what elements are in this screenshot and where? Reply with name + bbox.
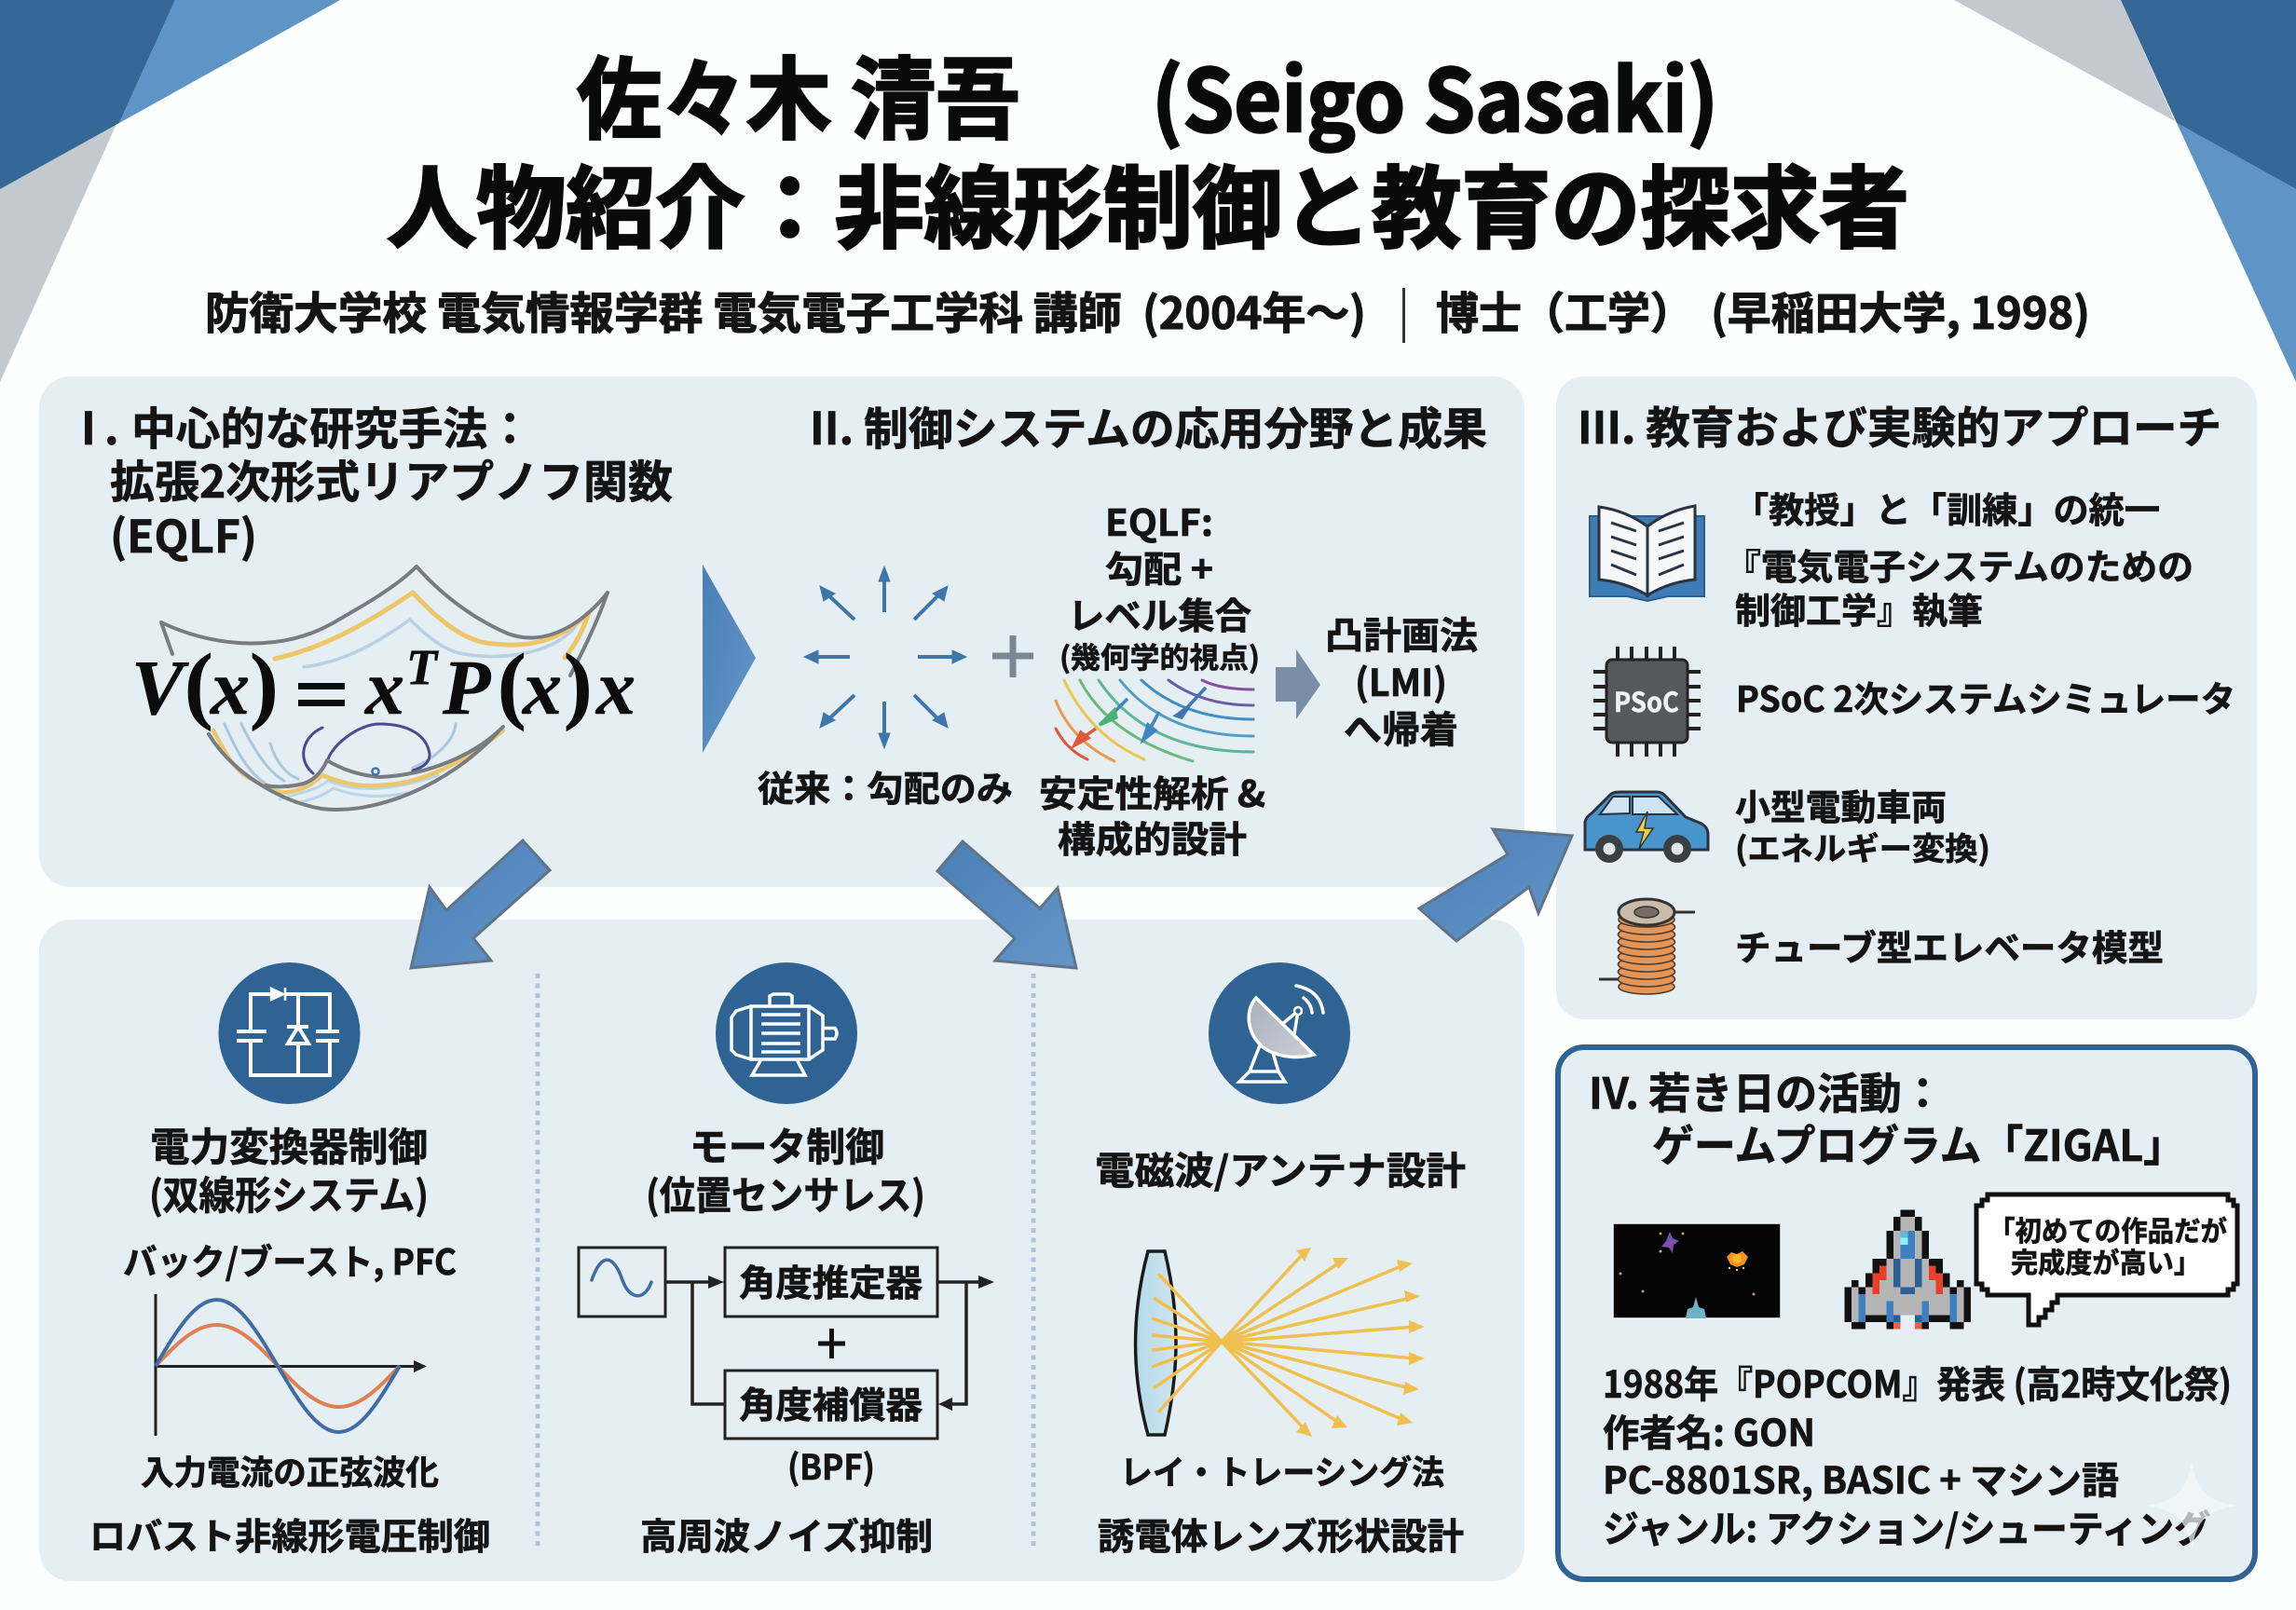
text: small electric vehicle [1735, 779, 1990, 869]
panel: III education and experimental approach [1556, 376, 2257, 1019]
label: EQLF gradient and level sets: レベル集合 [1068, 588, 1251, 640]
heading: section IV [1589, 1060, 2185, 1174]
chart: sensorless block diagram: 角度補償器 [739, 1377, 922, 1429]
subtitle: affiliation and degree: (2004年〜) [1142, 278, 1366, 342]
text: publication details [1603, 1355, 2232, 1553]
label: convex programming LMI: (LMI) [1355, 653, 1447, 707]
label: conventional gradient only: 従来：勾配のみ [758, 760, 1013, 812]
heading: section I: . [104, 392, 119, 457]
panel: IV early activity ZIGAL [1558, 1047, 2255, 1579]
icon: motor [716, 962, 857, 1104]
heading: section II: II. 制御システムの応用分野と成果 [810, 392, 1487, 457]
arrow: to education panel [1419, 829, 1572, 941]
icon: satellite dish [1209, 962, 1350, 1104]
subtitle: affiliation and degree: (早稲田大学, 1998) [1711, 278, 2090, 342]
label: stability analysis and constructive design [1039, 766, 1265, 864]
heading: power converter: 電力変換器制御 [150, 1116, 428, 1173]
icon: electric car [1585, 792, 1708, 863]
column: motor control [579, 962, 994, 1561]
text: small electric vehicle: 小型電動車両 [1735, 779, 1947, 830]
decorative corner: top right [1954, 0, 2296, 382]
formula: V(x)=x^T P(x) x: x [209, 645, 250, 731]
icon: pixel spaceship [1844, 1209, 1971, 1330]
icon: book [1590, 506, 1704, 601]
formula: V(x)=x^T P(x) x: x [594, 645, 636, 731]
chart: Lyapunov surface [161, 566, 608, 810]
icon: PSoC chip: PSoC [1614, 681, 1679, 720]
label: buck boost PFC: バック/ブースト, PFC [123, 1234, 457, 1285]
panel: I and II research method and applications [39, 376, 1524, 887]
divider: column 1 and 2 [535, 974, 540, 1549]
panel: application fields [39, 920, 1524, 1581]
formula: V(x)=x^T P(x) x: x [363, 645, 404, 731]
text: textbook authored: 『電気電子システムのための [1725, 539, 2194, 590]
label: input current sine shaping: 入力電流の正弦波化 [141, 1446, 439, 1494]
label: EQLF gradient and level sets: 勾配 + [1105, 541, 1213, 594]
label: EQLF gradient and level sets: (幾何学的視点) [1059, 634, 1260, 676]
icon: plus [992, 635, 1033, 677]
arrow: I to power converter [411, 840, 550, 968]
text: PSoC second order system simulator: PSoC 2次システムシミュレータ [1736, 671, 2235, 722]
label: robust nonlinear voltage control: ロバスト非線形電圧制御 [89, 1508, 490, 1561]
formula: V(x)=x^T P(x) x: x [521, 645, 562, 731]
heading: section III: III. 教育および実験的アプローチ [1578, 392, 2221, 457]
heading: position sensorless: (位置センサレス) [646, 1165, 925, 1221]
chart: rainbow level sets [1056, 680, 1253, 761]
column: electromagnetic antenna design [1095, 962, 1466, 1561]
label: convex programming LMI [1325, 606, 1478, 754]
formula: V(x)=x^T P(x) x: ) [250, 636, 279, 731]
icon: radial gradient arrows [804, 566, 966, 748]
heading: EM wave and antenna design: 電磁波/アンテナ設計 [1095, 1139, 1466, 1195]
heading: section IV: ゲームプログラム「ZIGAL」 [1652, 1112, 2185, 1174]
heading: section I line 2: 拡張2次形式リアプノフ関数 [110, 445, 673, 511]
heading: motor control: モータ制御 [690, 1116, 884, 1173]
text: unity of teaching and training: 「教授」と「訓練」の統一 [1733, 482, 2160, 533]
icon: gradient arrows over level sets [1074, 688, 1206, 745]
icon: coil tube [1599, 899, 1695, 994]
label: EQLF gradient and level sets: EQLF: [1105, 495, 1213, 547]
label: convex programming LMI: 凸計画法 [1325, 606, 1478, 660]
title: 人物紹介：非線形制御と教育の探求者 [387, 137, 1909, 266]
formula: V(x)=x^T P(x) x: ( [184, 636, 213, 731]
formula: V(x)=x^T P(x) x: ( [498, 636, 526, 731]
column: power converter control [89, 962, 490, 1561]
callout: pixel speech bubble [1976, 1194, 2237, 1325]
formula: V(x)=x^T P(x) x: ) [564, 636, 593, 731]
label: convex programming LMI: へ帰着 [1344, 700, 1458, 754]
chart: sensorless block diagram: 角度推定器 [739, 1255, 922, 1307]
icon: PSoC chip [1593, 647, 1701, 757]
text: publication details: ジャンル: アクション/シューティング [1603, 1499, 2210, 1553]
divider: column 2 and 3 [1031, 974, 1036, 1549]
heading: bilinear system: (双線形システム) [149, 1165, 429, 1221]
chart: sensorless block diagram: (BPF) [787, 1439, 875, 1490]
text: small electric vehicle: (エネルギー変換) [1735, 824, 1990, 869]
text: publication details: 1988年『POPCOM』発表 (高2時文化祭) [1603, 1355, 2232, 1409]
label: stability analysis and constructive design: 安定性解析 & [1039, 766, 1265, 818]
label: stability analysis and constructive design: 構成的設計 [1058, 812, 1247, 864]
subtitle: affiliation and degree: 博士（工学） [1436, 278, 1693, 342]
formula: V(x)=x^T P(x) x [131, 636, 636, 731]
arrow: section I to II [703, 565, 756, 753]
text: textbook authored: 制御工学』執筆 [1735, 582, 1983, 634]
heading: section I: 中心的な研究手法： [131, 392, 532, 457]
title: (Seigo Sasaki) [1152, 33, 1718, 157]
chart: sine waveforms [156, 1294, 427, 1436]
text: publication details: 作者名: GON [1603, 1403, 1815, 1457]
formula: V(x)=x^T P(x) x: P [442, 645, 491, 731]
heading: section IV: IV. 若き日の活動： [1589, 1060, 1944, 1122]
label: EQLF gradient and level sets [1059, 495, 1260, 676]
heading: section I line 3: (EQLF) [110, 500, 257, 566]
heading: section I: I [81, 392, 96, 457]
text: textbook authored [1725, 539, 2194, 634]
text: publication details: PC-8801SR, BASIC + マシン語 [1603, 1451, 2119, 1505]
label: high frequency noise suppression: 高周波ノイズ抑制 [640, 1508, 933, 1561]
chart: lens ray tracing [1135, 1248, 1425, 1437]
icon: sparkle [2147, 1460, 2237, 1550]
arrow: reduces to LMI [1276, 649, 1320, 719]
label: ray tracing method: レイ・トレーシング法 [1120, 1446, 1444, 1494]
title [387, 28, 1909, 266]
label: dielectric lens shape design: 誘電体レンズ形状設計 [1098, 1508, 1464, 1561]
title: 佐々木 清吾 [577, 28, 1020, 157]
screenshot: game screen [1613, 1223, 1781, 1318]
formula: V(x)=x^T P(x) x: V [131, 645, 189, 731]
subtitle: affiliation and degree [205, 278, 2090, 343]
arrow: II to application fields [937, 841, 1076, 968]
text: tube elevator model: チューブ型エレベータ模型 [1735, 920, 2164, 971]
subtitle: affiliation and degree: 防衛大学校 電気情報学群 電気電子工学科 講師 [205, 278, 1122, 342]
callout: pixel speech bubble: 完成度が高い」 [2011, 1240, 2201, 1281]
decorative corner: top left [0, 0, 340, 382]
chart: sensorless block diagram [579, 1248, 994, 1490]
icon: converter circuit [218, 962, 360, 1104]
callout: pixel speech bubble: 「初めての作品だが [1988, 1208, 2227, 1249]
formula: V(x)=x^T P(x) x: T [406, 639, 439, 695]
